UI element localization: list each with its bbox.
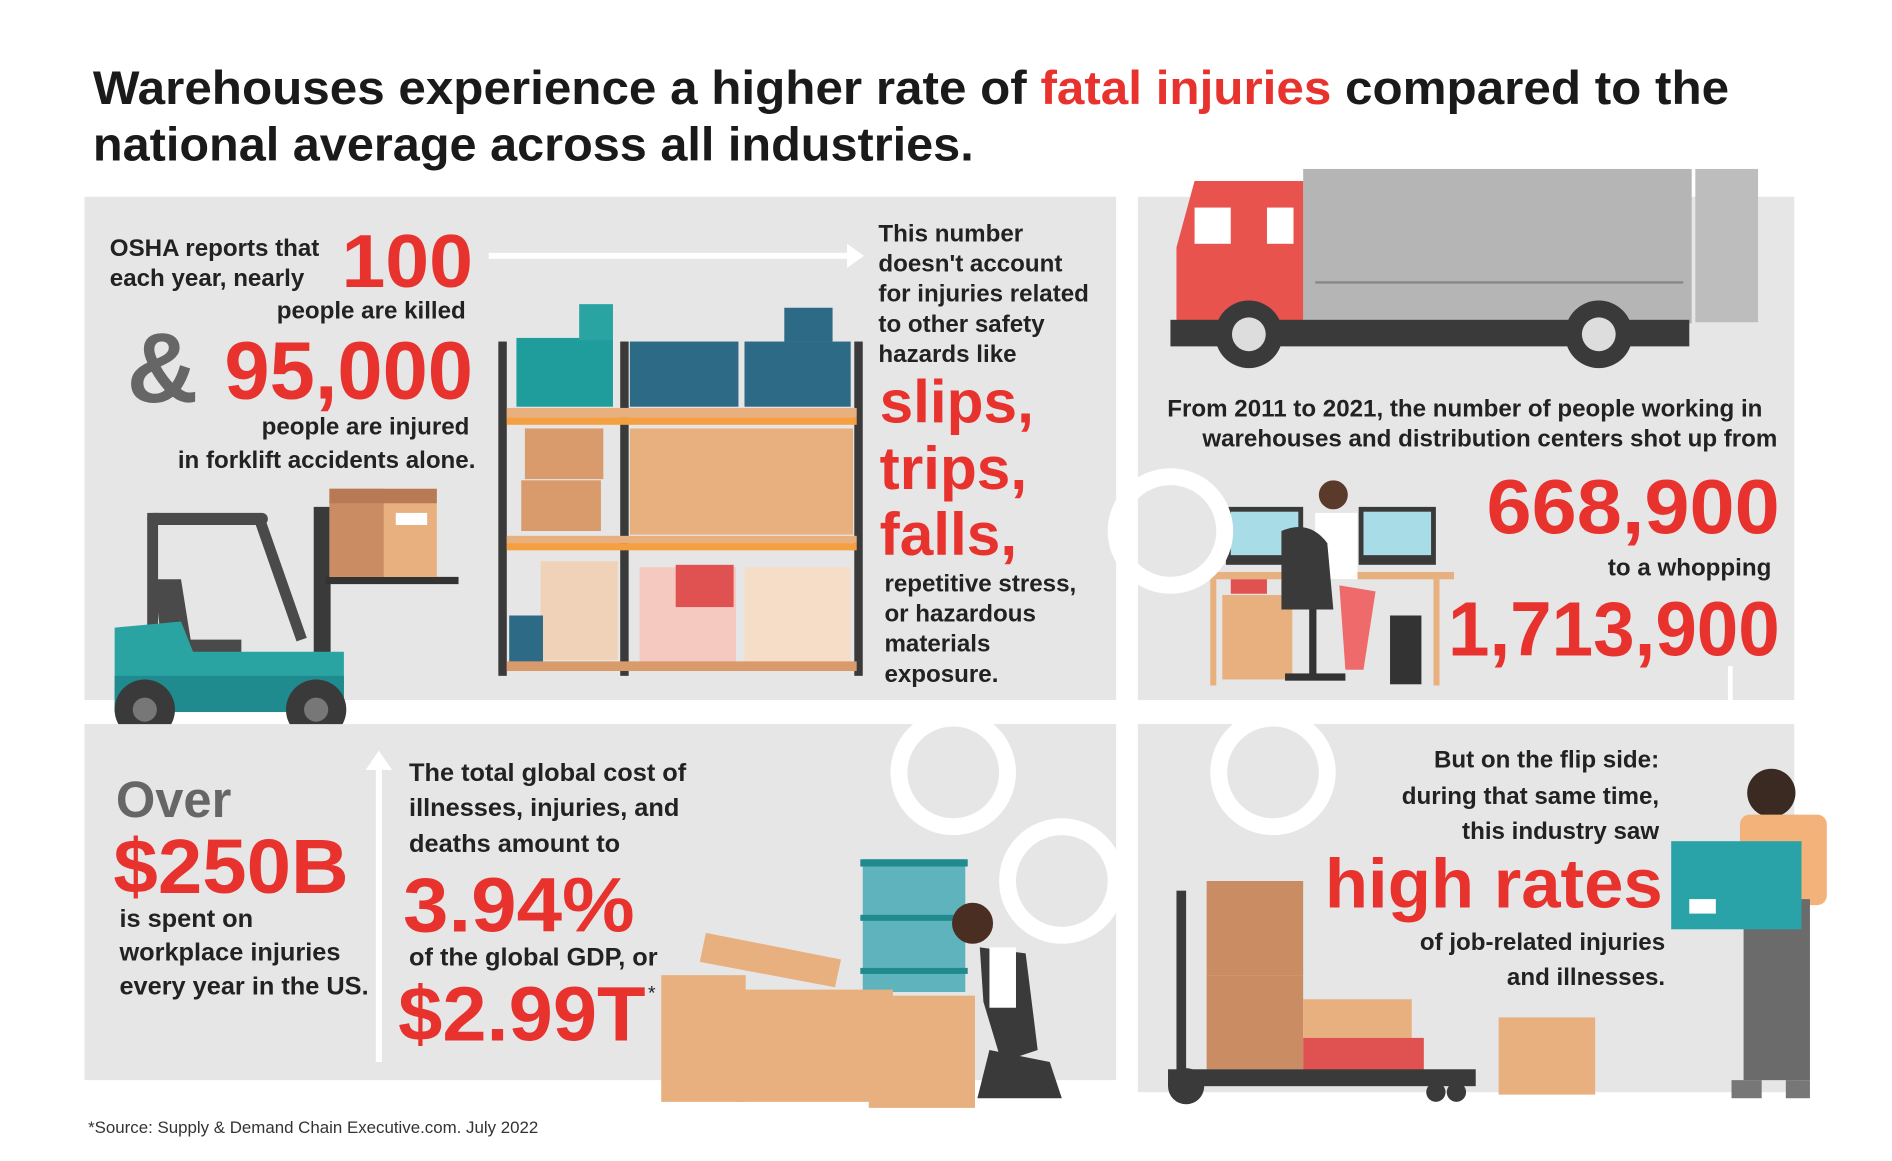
text: growth intro: warehouses and distribution centers shot up from <box>1201 426 1777 453</box>
stat: $250B <box>113 771 369 1000</box>
arrow: right <box>489 244 864 268</box>
text: GDP: $2.99T <box>398 971 646 1057</box>
stat: 668,900: 668,900 <box>1487 464 1780 550</box>
text: flip side: this industry saw <box>1462 818 1659 845</box>
text: GDP: 3.94% <box>403 863 635 949</box>
icon: desk worker <box>1192 480 1454 685</box>
text: flip side: But on the flip side: <box>1434 747 1659 774</box>
text: slips trips falls: trips, <box>880 434 1027 502</box>
stat: $250B: $250B <box>113 824 349 910</box>
text: OSHA <box>110 235 475 474</box>
text: GDP: of the global GDP, or <box>409 943 658 971</box>
stat: 100: 100 <box>341 219 473 303</box>
panel: workforce growth <box>1138 169 1794 771</box>
text: OSHA: people are injured <box>262 413 469 440</box>
title <box>93 61 1729 171</box>
stat: $250B: workplace injuries <box>118 939 340 967</box>
text: GDP: * <box>648 983 656 1004</box>
title: Warehouses experience a higher rate of fatal injuries compared to the <box>93 61 1729 114</box>
panel: global cost <box>84 724 1116 1108</box>
stat: $250B: every year in the US. <box>119 972 369 1000</box>
text: flip side: and illnesses. <box>1507 964 1665 991</box>
text: growth intro: to a whopping <box>1608 555 1771 582</box>
panel: injury rates <box>1138 724 1827 1104</box>
text: OSHA: in forklift accidents alone. <box>178 447 475 474</box>
text: flip side: of job-related injuries <box>1420 929 1665 956</box>
icon: forklift <box>115 489 459 740</box>
text: growth intro <box>1167 395 1777 582</box>
icon: pallet jack <box>1168 881 1595 1104</box>
text: other hazards: to other safety <box>878 311 1045 338</box>
decoration: puzzle rings <box>899 477 1327 935</box>
stat: high rates: high rates <box>1325 845 1663 923</box>
text: GDP: illnesses, injuries, and <box>409 794 679 822</box>
text: growth intro: From 2011 to 2021, the number of people working in <box>1167 395 1762 422</box>
text: other hazards: This number <box>878 220 1024 247</box>
arrow: down-left <box>1669 666 1730 771</box>
text: other hazards: repetitive stress, <box>884 570 1076 597</box>
text: other hazards: hazards like <box>878 341 1017 368</box>
text: slips trips falls: falls, <box>880 500 1017 568</box>
source note: *Source: Supply & Demand Chain Executive.com. July 2022 <box>88 1118 538 1137</box>
stat: $250B: Over <box>116 771 231 828</box>
text: other hazards: exposure. <box>884 661 998 688</box>
icon: worker with box <box>1671 769 1827 1098</box>
text: slips trips falls: slips, <box>880 367 1034 435</box>
arrow: up <box>366 751 392 1062</box>
icon: boxes and worker <box>661 859 1062 1108</box>
text: OSHA: people are killed <box>277 298 466 325</box>
text: GDP: deaths amount to <box>409 830 620 858</box>
stat: 1,713,900: 1,713,900 <box>1448 586 1780 672</box>
icon: truck <box>1170 169 1758 368</box>
text: other hazards: doesn't account <box>878 251 1062 278</box>
text: OSHA: OSHA reports that <box>110 235 319 262</box>
text: flip side <box>1402 747 1665 991</box>
icon: shelving <box>498 304 863 676</box>
text: OSHA: each year, nearly <box>110 265 305 292</box>
stat: 95,000: 95,000 <box>224 325 473 416</box>
text: other hazards <box>878 220 1089 688</box>
title: national average across all industries. <box>93 118 974 171</box>
text: flip side: during that same time, <box>1402 783 1659 810</box>
stat: 95,000: & <box>127 312 198 423</box>
text: slips trips falls <box>880 367 1034 568</box>
text: GDP <box>398 759 687 1057</box>
text: other hazards: for injuries related <box>878 281 1089 308</box>
stat: $250B: is spent on <box>119 905 253 933</box>
stat: 95,000 <box>127 312 473 423</box>
text: GDP: The total global cost of <box>409 759 687 787</box>
text: other hazards: materials <box>884 631 990 658</box>
text: other hazards: or hazardous <box>884 601 1036 628</box>
panel: forklift stats <box>84 197 1116 740</box>
